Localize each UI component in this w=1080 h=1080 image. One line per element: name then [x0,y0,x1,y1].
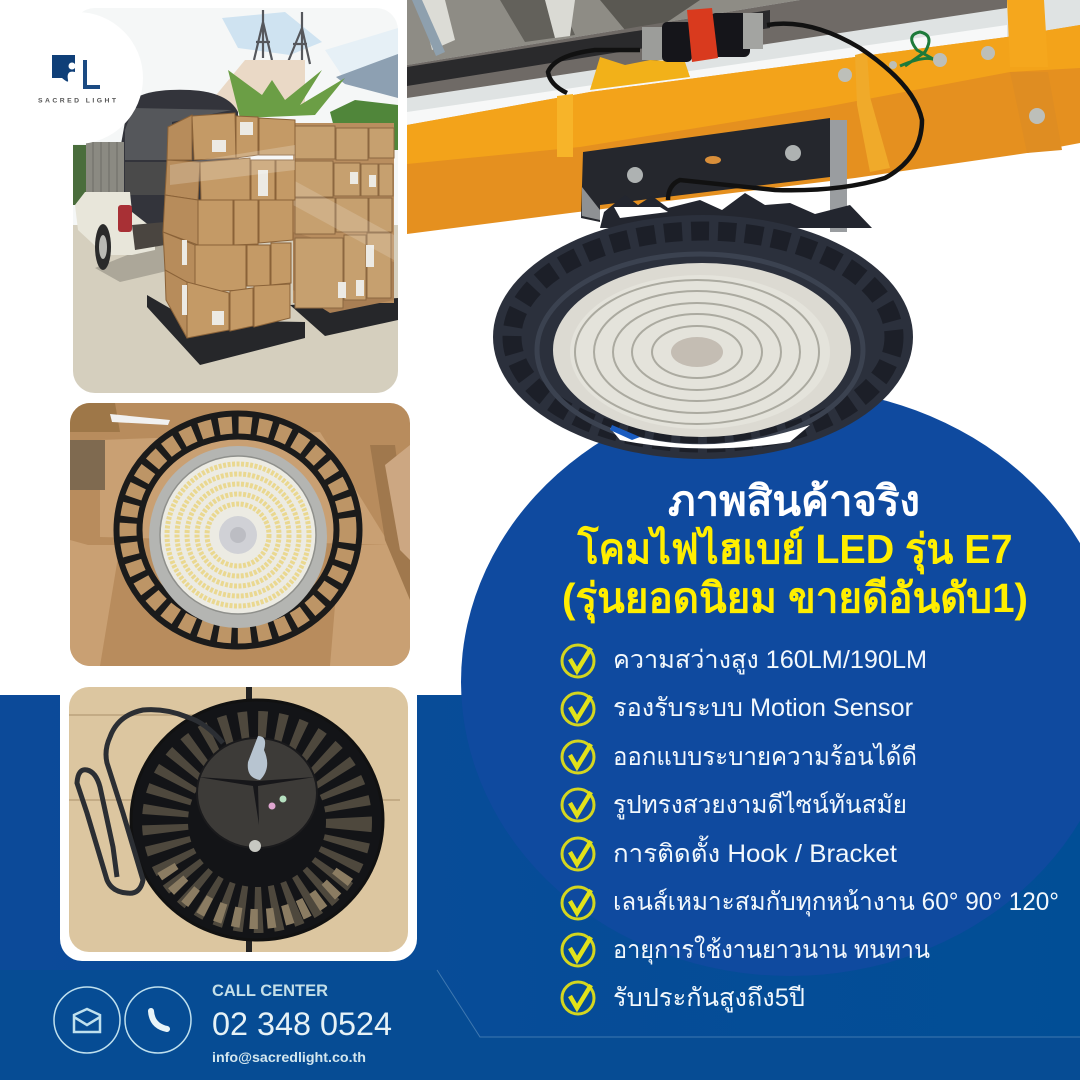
inline connector [642,8,763,62]
feature list [562,645,1059,1014]
icon: telecom towers [254,10,310,64]
heading line 1: ภาพสินค้าจริง [668,478,920,524]
feature 5 [562,835,897,870]
background: white upper area [0,0,1080,695]
phone number: 02 348 0524 [212,1006,392,1042]
heading line 2: โคมไฟไฮเบย์ LED รุ่น E7 [577,525,1012,575]
feature 6: เลนส์เหมาะสมกับทุกหน้างาน 60° 90° 120° [613,888,1059,917]
heading line 3: (รุ่นยอดนิยม ขายดีอันดับ1) [562,575,1028,624]
logo mark: SL [52,55,100,89]
contact footer [54,981,392,1065]
box stack right [293,123,394,313]
metal roof [407,0,1080,130]
power wires [548,24,922,200]
feature 3: ออกแบบระบายความร้อนได้ดี [613,742,917,771]
power cable [77,710,223,893]
email address: info@sacredlight.co.th [212,1049,366,1065]
logo text: SACRED LIGHT [38,98,117,104]
banana trees [228,70,398,150]
footer band with diagonal line [0,970,1080,1080]
feature 1: ความสว่างสูง 160LM/190LM [613,646,927,675]
truck cage [86,142,124,194]
background: blue lower band [0,695,1080,1080]
truck body [75,192,155,255]
feature 7: อายุการใช้งานยาวนาน ทนทาน [613,935,930,965]
lamp body [493,193,913,459]
pallets [147,295,398,365]
photo card: lamp back on cardboard [60,687,417,961]
LED lens [149,446,327,628]
lens [553,263,851,437]
feature 5: การติดตั้ง Hook / Bracket [613,835,897,868]
photo: lamp face on cardboard [70,403,410,666]
call center label: CALL CENTER [212,981,328,1000]
ground shadow [95,245,164,282]
hanging hook [248,736,267,780]
feature 8: รับประกันสูงถึง5ปี [613,984,805,1013]
bracket [581,118,847,232]
photo: pallets of boxes at truck [73,8,398,395]
cooling fins wheel [131,700,383,940]
ceiling lamp photo [407,0,1080,459]
feature 2: รองรับระบบ Motion Sensor [613,694,913,722]
feature 4: รูปทรงสวยงามดีไซน์ทันสมัย [613,790,907,820]
box stack left [163,113,295,338]
icon: phone [125,987,191,1053]
icon: email [54,987,120,1053]
building [212,60,305,112]
ground wire and bolts [838,32,1045,124]
logo badge [11,12,143,144]
truck canopy [121,90,239,224]
feature 8 [562,982,805,1014]
orange beam [407,0,1080,234]
black perforated ring [128,425,348,635]
heading [562,478,1028,624]
blue feature circle [461,388,1080,976]
driver hub [197,738,317,848]
metal awning [336,54,398,98]
